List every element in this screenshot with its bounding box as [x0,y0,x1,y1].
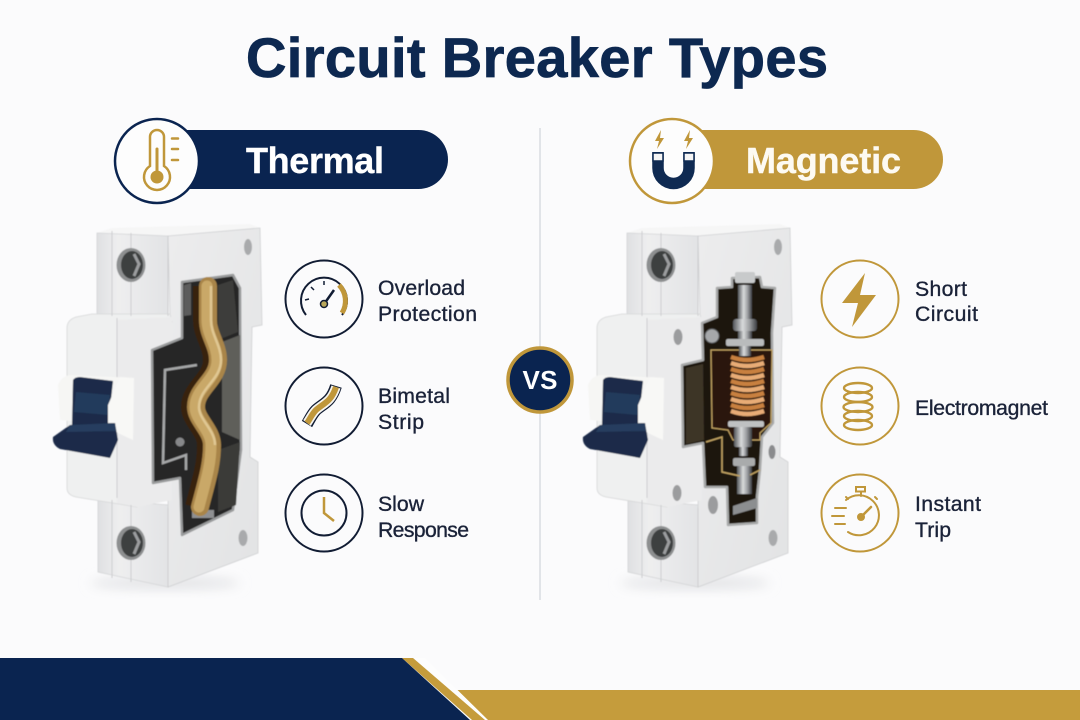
divider line [539,128,541,600]
feature: overload protection: Overload [378,277,465,300]
panel: thermal [53,119,477,588]
feature: overload protection: Protection [378,303,477,326]
icon: clock [302,490,346,536]
magnetic header [630,119,943,203]
footer band [0,658,1080,720]
feature: bimetal strip: Bimetal [378,385,450,408]
feature: overload protection [286,260,477,338]
feature: short circuit: Short [915,278,967,301]
panel: magnetic [583,119,1048,588]
icon: gauge [301,278,347,315]
thermal header [115,119,448,203]
feature: slow response [286,474,469,552]
thermal header: Thermal [246,140,384,181]
magnetic breaker cutaway [583,224,792,588]
VS badge [508,348,572,412]
feature: electromagnet [822,368,1048,444]
icon: stopwatch [832,487,879,535]
feature: bimetal strip: Strip [378,411,424,434]
icon: thermometer [144,130,178,190]
VS badge: VS [522,365,558,395]
feature: slow response: Response [378,519,469,542]
copper coil [731,357,764,414]
icon: coil [844,383,872,430]
feature: electromagnet: Electromagnet [915,397,1048,420]
title: Circuit Breaker Types [246,26,828,89]
feature: short circuit [822,260,978,338]
feature: slow response: Slow [378,493,425,516]
feature: instant trip: Trip [915,519,951,542]
magnetic header: Magnetic [746,140,901,181]
icon: bimetal strip [307,386,336,424]
feature: short circuit: Circuit [915,303,978,326]
feature: bimetal strip [286,368,450,444]
icon: lightning bolt [842,273,876,327]
icon: magnet [653,130,694,183]
feature: instant trip [822,474,981,552]
feature: instant trip: Instant [915,493,981,516]
thermal breaker cutaway [53,224,262,588]
